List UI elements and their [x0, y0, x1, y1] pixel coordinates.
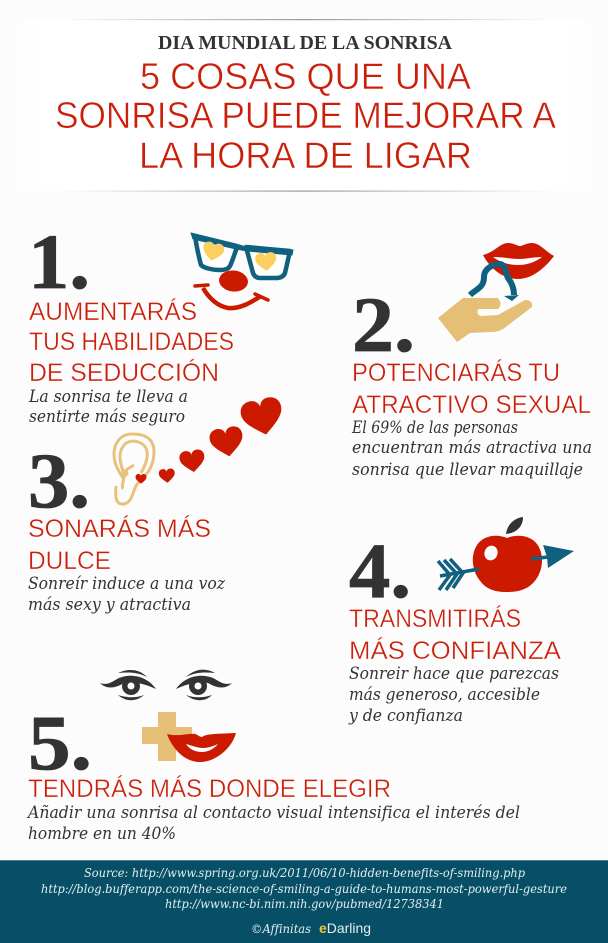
item 2: text: El 69% de las personas [351, 418, 518, 437]
item 2: text: encuentran más atractiva una [352, 438, 592, 457]
item 5: text [26, 699, 520, 843]
sources [41, 865, 567, 911]
item 4: text: MÁS CONFIANZA [349, 636, 561, 665]
sources: http://www.nc-bi.nim.nih.gov/pubmed/12738341 [165, 896, 444, 911]
item 2: text [351, 281, 592, 479]
item 4: text [348, 527, 561, 725]
item 3: text: Sonreír induce a una voz [28, 574, 225, 593]
item 4: text: TRANSMITIRÁS [349, 604, 521, 633]
item 1: text: TUS HABILIDADES [29, 328, 234, 356]
main title: LA HORA DE LIGAR [139, 134, 472, 176]
item 3: text: SONARÁS MÁS [28, 514, 211, 543]
item 3: text: 3. [28, 437, 90, 524]
icon: clown face with glasses [191, 233, 293, 308]
item 1: text: La sonrisa te lleva a [28, 387, 188, 406]
item 5: text: Añadir una sonrisa al contacto visual intensifica el interés del [26, 803, 520, 822]
logos: eDarling [319, 920, 371, 936]
logos: ©Affinitas [251, 921, 311, 936]
item 1: text: sentirte más seguro [29, 407, 185, 426]
item 1: text: DE SEDUCCIÓN [29, 358, 219, 387]
item 1: text: AUMENTARÁS [29, 297, 197, 326]
item 4: text: 4. [349, 527, 411, 614]
item 4: text: Sonreir hace que parezcas [349, 664, 559, 683]
item 2: text: 2. [352, 281, 415, 368]
title banner [0, 19, 608, 192]
item 3: text: DULCE [28, 547, 111, 575]
icon: apple pierced by arrow [438, 517, 574, 592]
footer [0, 860, 608, 943]
item 2: text: POTENCIARÁS TU [352, 358, 560, 387]
item 5: text: 5. [28, 699, 92, 786]
icon: plus and smile [142, 712, 236, 762]
item 2: text: sonrisa que llevar maquillaje [352, 460, 583, 479]
icon: lips, arrow and hand [438, 243, 554, 342]
main title: SONRISA PUEDE MEJORAR A [55, 94, 556, 136]
item 4: text: más generoso, accesible [349, 685, 540, 704]
sources: http://blog.bufferapp.com/the-science-of-smiling-a-guide-to-humans-most-powerful-gesture [41, 881, 567, 896]
icon: ear and hearts [114, 395, 286, 504]
item 1: text: 1. [28, 218, 90, 305]
subtitle: DIA MUNDIAL DE LA SONRISA [158, 32, 453, 54]
sources: Source: http://www.spring.org.uk/2011/06/10-hidden-benefits-of-smiling.php [84, 865, 525, 880]
item 4: text: y de confianza [348, 706, 463, 725]
item 1: text [28, 218, 234, 426]
item 5: text: hombre en un 40% [28, 824, 176, 843]
main title: 5 COSAS QUE UNA [140, 55, 471, 97]
item 5: text: TENDRÁS MÁS DONDE ELEGIR [28, 774, 391, 803]
item 2: text: ATRACTIVO SEXUAL [352, 391, 591, 419]
main title [55, 55, 556, 176]
item 3: text: más sexy y atractiva [28, 595, 191, 614]
item 3: text [28, 437, 225, 614]
logos [251, 920, 371, 936]
icon: eyes [100, 670, 232, 700]
